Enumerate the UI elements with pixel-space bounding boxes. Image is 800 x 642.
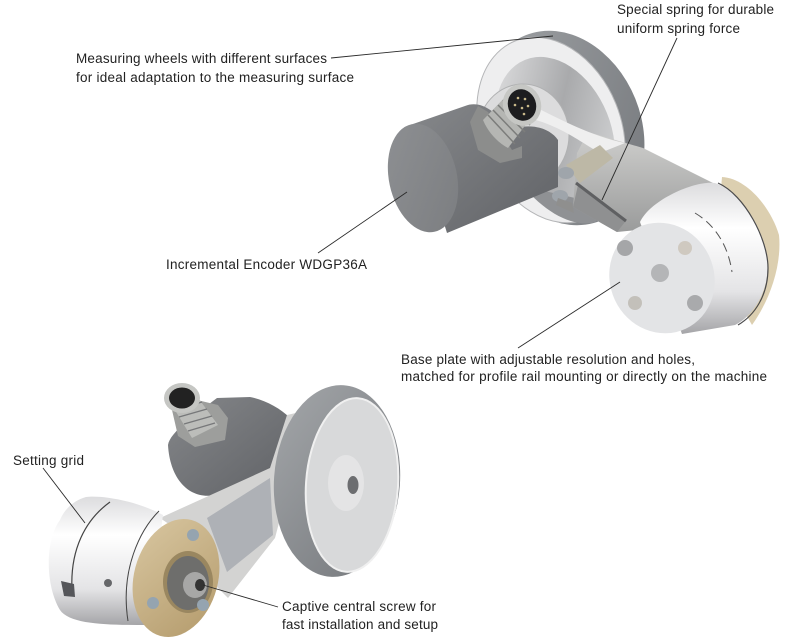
- bottom gold plate: [120, 509, 232, 642]
- label: captive central screw: [282, 599, 438, 632]
- label: measuring wheels: Measuring wheels with different surfaces: [76, 51, 327, 66]
- top clamp screws: [552, 167, 574, 213]
- bottom product: encoder with measuring wheel: [49, 381, 407, 642]
- label: setting grid: Setting grid: [13, 453, 84, 468]
- label: special spring: uniform spring force: [617, 21, 740, 36]
- label: incremental encoder: Incremental Encoder WDGP36A: [166, 257, 367, 272]
- bottom connector: [164, 383, 228, 447]
- top gold collar: [715, 177, 779, 325]
- label: special spring: Special spring for durable: [617, 2, 774, 17]
- top clamp cylinder: [591, 183, 768, 351]
- label: captive central screw: fast installation and setup: [282, 617, 438, 632]
- label: captive central screw: Captive central screw for: [282, 599, 436, 614]
- label: base plate: Base plate with adjustable resolution and holes,: [401, 352, 695, 367]
- top spring arm: [528, 107, 713, 232]
- label: base plate: matched for profile rail mounting or directly on the machine: [401, 369, 767, 384]
- label: measuring wheels: for ideal adaptation to the measuring surface: [76, 70, 354, 85]
- top connector: [470, 79, 547, 163]
- top product: encoder with base plate: [378, 6, 779, 351]
- leader lines: [43, 36, 677, 607]
- bottom spring arm: [160, 412, 300, 598]
- label: special spring: [617, 2, 774, 36]
- bottom measuring wheel: [267, 381, 407, 581]
- top encoder housing: [378, 104, 558, 239]
- bottom encoder housing: [168, 397, 290, 496]
- label: base plate: [401, 352, 767, 384]
- top measuring wheel: [450, 6, 673, 250]
- label: measuring wheels: [76, 51, 354, 85]
- bottom clamp cylinder: [49, 497, 163, 625]
